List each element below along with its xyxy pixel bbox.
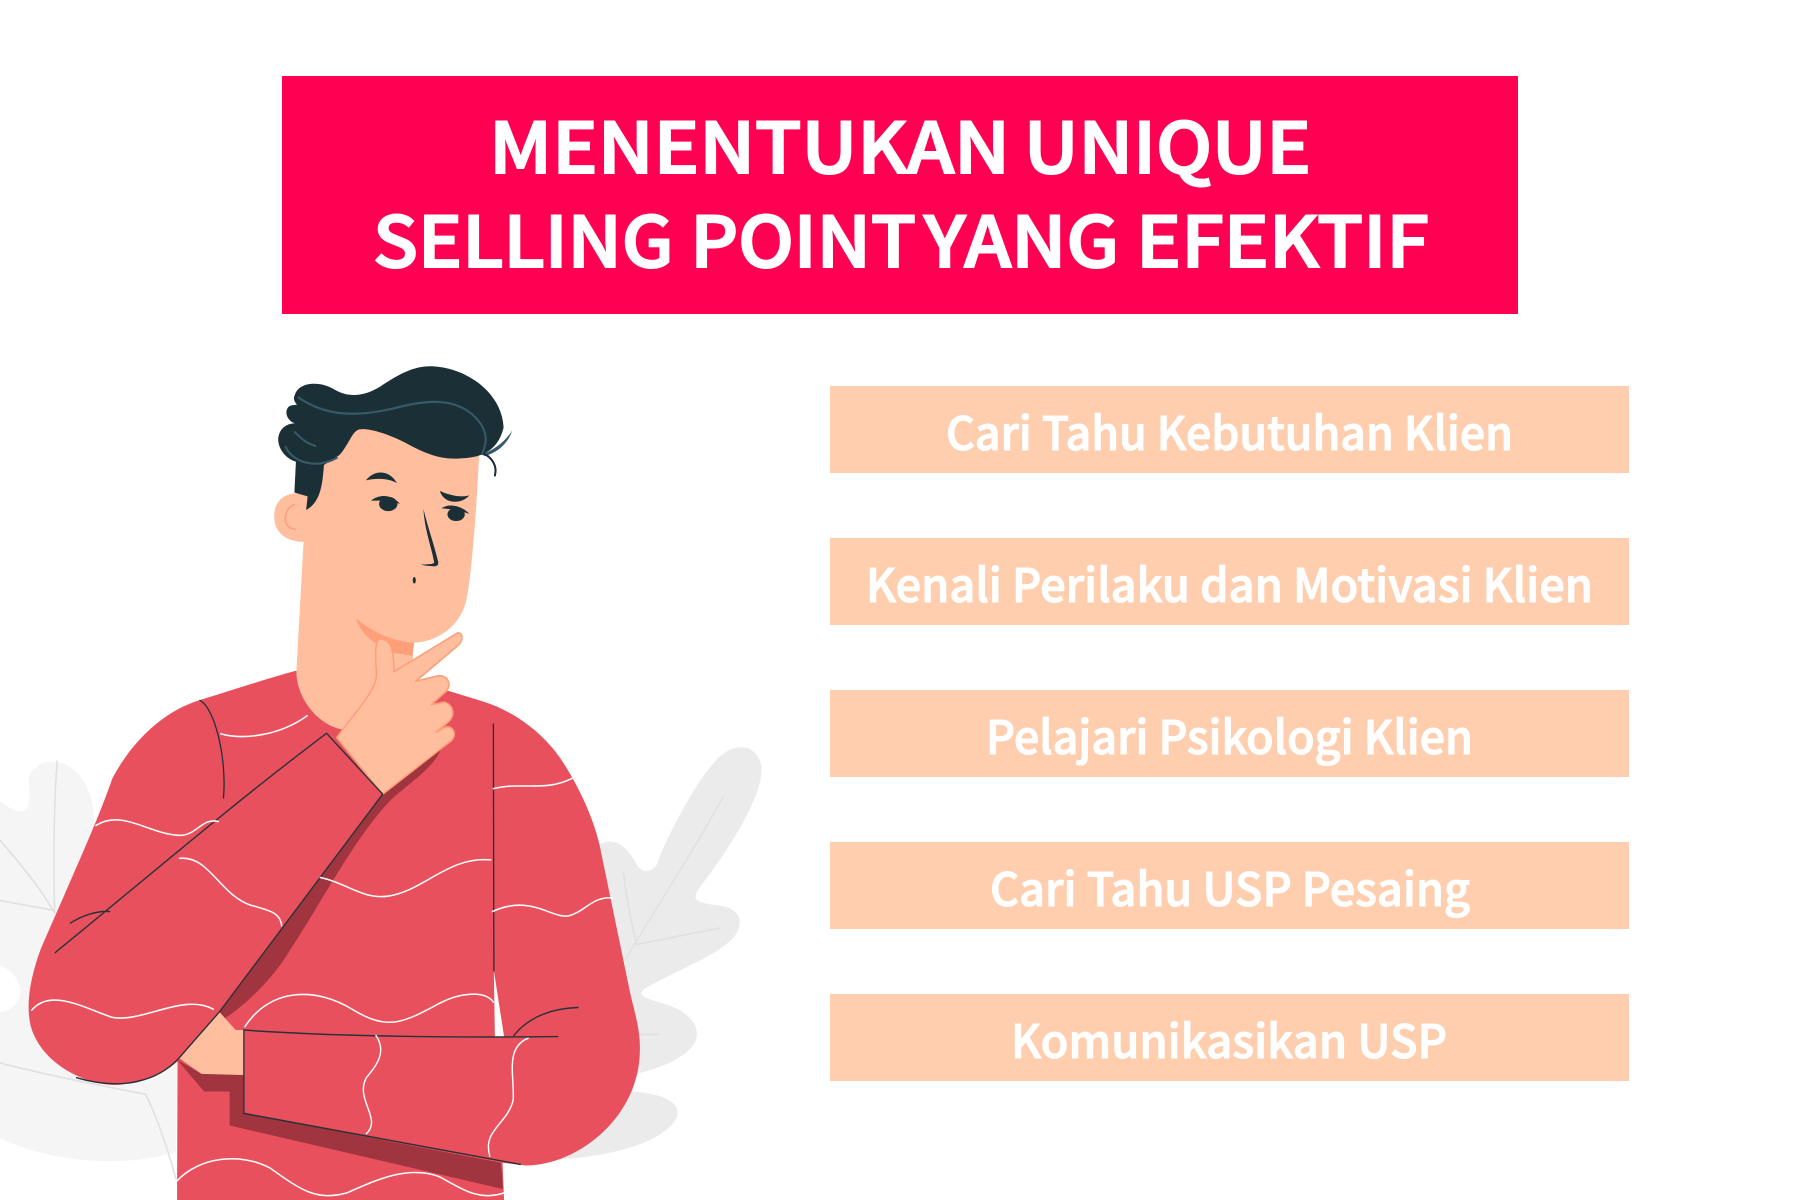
gap between torso and arm: [494, 971, 504, 1037]
title banner: MENENTUKAN: [489, 93, 1010, 194]
list item 1: [830, 386, 1629, 473]
sweater dark seams: [55, 700, 578, 1164]
list item 5: [830, 994, 1629, 1081]
chin shadow: [356, 618, 414, 656]
hair: [278, 366, 512, 510]
face: [366, 472, 469, 584]
list item 3: Pelajari Psikologi Klien: [986, 702, 1473, 768]
sweater shadows: [177, 749, 503, 1189]
head and neck: [296, 422, 480, 740]
title banner: UNIQUE: [1024, 93, 1311, 194]
left arm sleeve: [46, 733, 383, 1084]
list item 1: Cari Tahu Kebutuhan Klien: [946, 398, 1513, 464]
title banner: [282, 76, 1518, 314]
background leaf left: [0, 761, 179, 1179]
background leaf right: [510, 747, 762, 1160]
lower hand: [180, 1012, 244, 1075]
illustration: thinking man with leaves: [0, 366, 762, 1200]
ear: [274, 493, 309, 542]
list item 3: [830, 690, 1629, 777]
list item 2: Kenali Perilaku dan Motivasi Klien: [866, 550, 1593, 616]
sweater body: [29, 671, 640, 1200]
list item 4: Cari Tahu USP Pesaing: [990, 854, 1470, 920]
list item 5: Komunikasikan USP: [1011, 1006, 1447, 1072]
hand: [337, 633, 462, 794]
title banner: SELLING POINT: [373, 187, 916, 288]
title banner: YANG EFEKTIF: [923, 187, 1429, 288]
list item 4: [830, 842, 1629, 929]
sweater white stripes: [32, 716, 612, 1196]
